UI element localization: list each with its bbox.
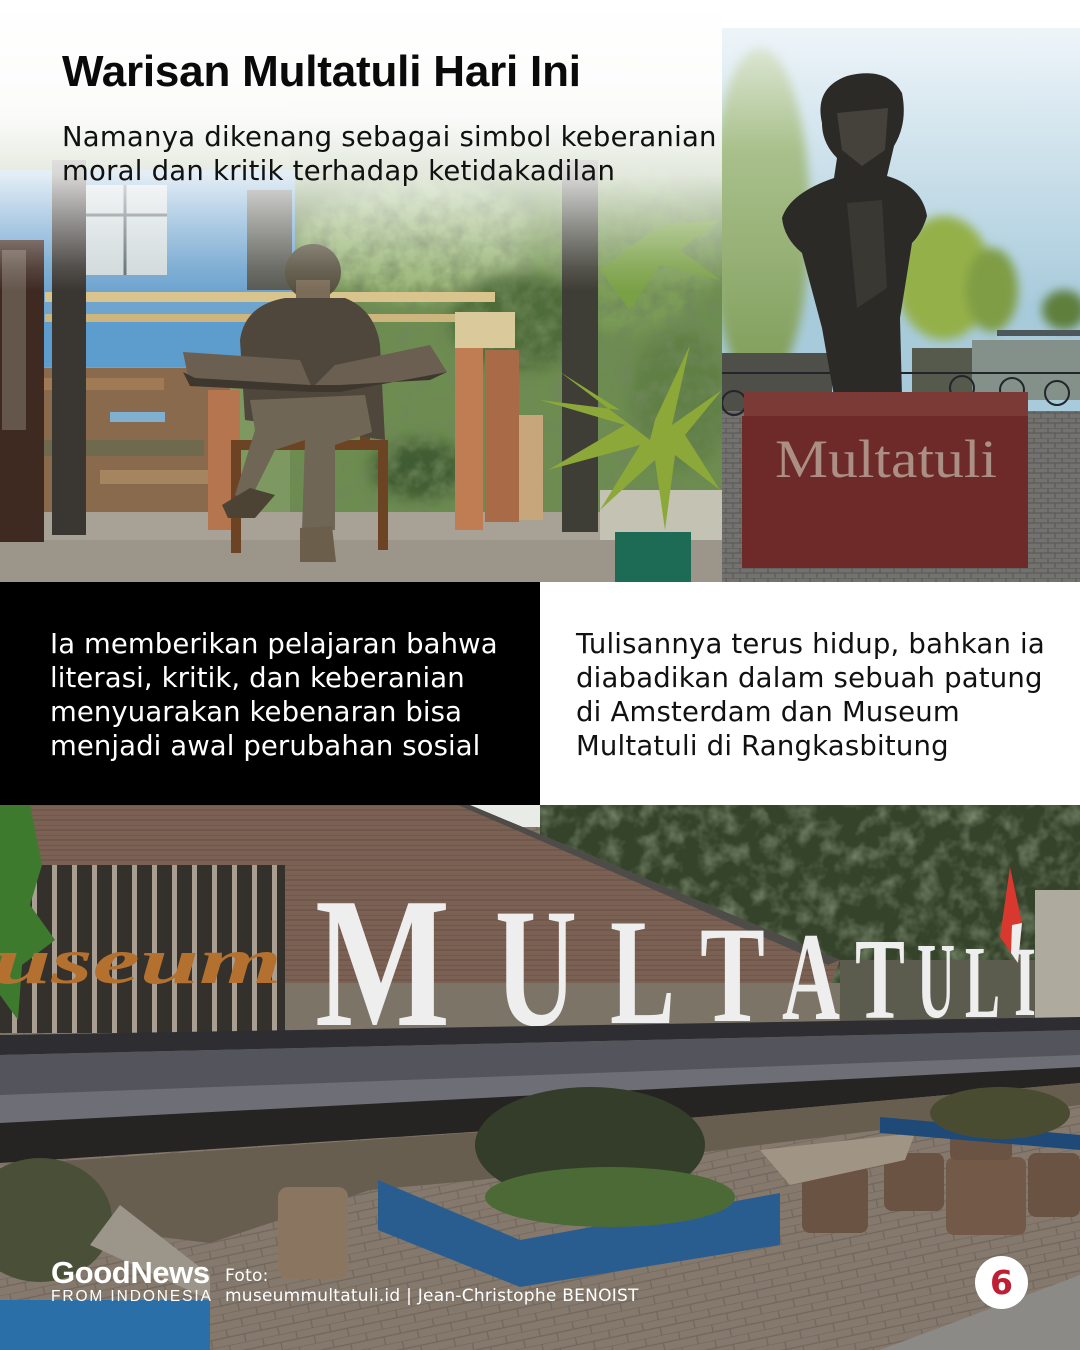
- body text: lesson: Ia memberikan pelajaran bahwa: [50, 628, 498, 660]
- panel: black text block: [0, 582, 540, 805]
- sign letters: T: [855, 916, 905, 1044]
- body text: legacy: diabadikan dalam sebuah patung: [576, 662, 1043, 694]
- body text: legacy: Tulisannya terus hidup, bahkan ia: [576, 628, 1045, 660]
- leaves: [0, 805, 55, 1020]
- subtitle: moral dan kritik terhadap ketidakadilan: [62, 154, 615, 186]
- page number badge: 6: [990, 1263, 1013, 1302]
- planter: [615, 532, 691, 582]
- pedestal: [744, 392, 1028, 416]
- bust: [782, 73, 927, 396]
- sign letters: U: [495, 874, 577, 1062]
- photo credit: Foto:: [225, 1266, 269, 1286]
- sign letters: [315, 860, 1036, 1066]
- subtitle: [62, 121, 717, 186]
- flag: [1000, 867, 1022, 963]
- roof: [0, 805, 840, 985]
- photo: Multatuli bust in Amsterdam: [722, 28, 1080, 582]
- logo: GoodNews from Indonesia: GoodNews: [51, 1255, 210, 1290]
- body text: lesson: literasi, kritik, dan keberanian: [50, 662, 465, 694]
- sign letters: L: [610, 888, 675, 1056]
- title: Warisan Multatuli Hari Ini: [62, 47, 581, 96]
- body text: lesson: [50, 628, 498, 762]
- wall band: [0, 1017, 1080, 1055]
- left plants and planter: [0, 1158, 112, 1282]
- body text: legacy: [576, 628, 1045, 762]
- subtitle: Namanya dikenang sebagai simbol keberanian: [62, 121, 717, 153]
- sign letters: L: [965, 925, 1000, 1040]
- body text: lesson: menyuarakan kebenaran bisa: [50, 696, 462, 728]
- photo: Museum Multatuli sign: [0, 805, 1080, 1350]
- sign letters: A: [782, 908, 840, 1047]
- photo credit: [225, 1266, 639, 1306]
- pedestal inscription: Multatuli: [775, 429, 997, 489]
- photo credit: museummultatuli.id | Jean-Christophe BENOIST: [225, 1286, 639, 1306]
- statue: [183, 244, 447, 562]
- sign letters: U: [917, 922, 955, 1041]
- logo: GoodNews from Indonesia: [51, 1255, 213, 1305]
- body text: lesson: menjadi awal perubahan sosial: [50, 730, 480, 762]
- slats: [0, 865, 285, 1033]
- sign letters: I: [1014, 926, 1036, 1037]
- sign letters: M: [315, 860, 450, 1066]
- road corner: [880, 1275, 1080, 1350]
- sign letters: T: [700, 898, 765, 1051]
- logo: GoodNews from Indonesia: FROM INDONESIA: [51, 1288, 213, 1305]
- body text: legacy: di Amsterdam dan Museum: [576, 696, 960, 728]
- page number badge: [975, 1256, 1028, 1309]
- logs: [278, 1130, 1080, 1279]
- photo: Multatuli statue reading in Rangkasbitung: [0, 122, 722, 582]
- planter bed: [378, 1180, 780, 1287]
- panel: white text block: [540, 582, 1080, 805]
- body text: legacy: Multatuli di Rangkasbitung: [576, 730, 949, 762]
